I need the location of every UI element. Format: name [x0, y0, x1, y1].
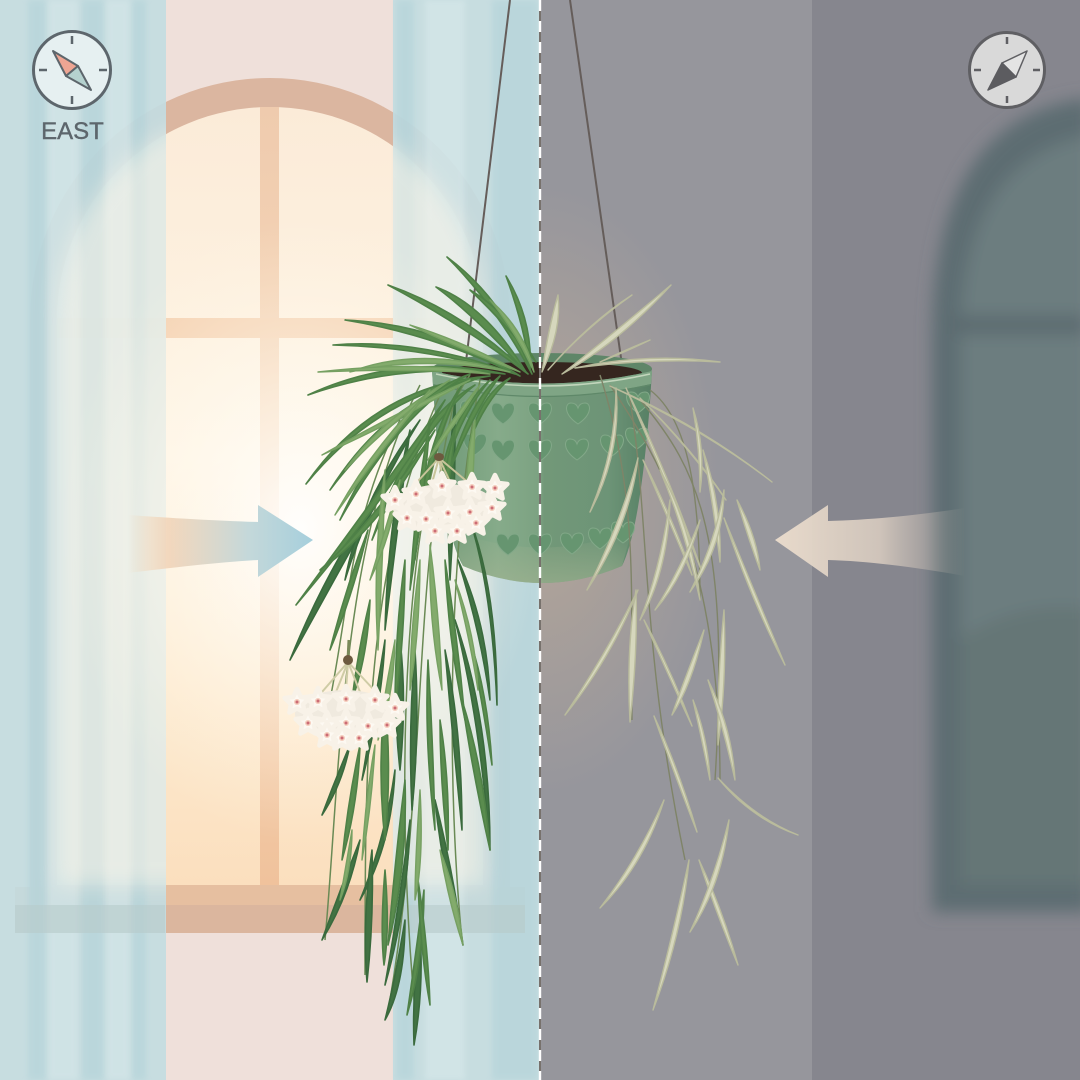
blurred distant window — [932, 98, 1080, 912]
right curtain — [393, 0, 540, 1080]
flower cluster: upper hoya umbel — [383, 453, 507, 542]
dark leaves — [290, 400, 497, 1045]
plant pot with heart pattern — [432, 353, 652, 583]
left curtain — [0, 0, 166, 1080]
thin pale stems — [600, 375, 720, 860]
icon: east compass — [34, 32, 110, 108]
arrow: weak light from far window — [775, 505, 965, 577]
light green leaves — [318, 300, 534, 945]
arrow: light entering from window — [128, 505, 313, 577]
healthy green trailing foliage — [290, 257, 536, 1045]
window light glow through curtains — [0, 0, 540, 1080]
pale leaves — [542, 285, 798, 1010]
heart reliefs — [461, 392, 649, 555]
thin stems — [325, 375, 480, 1010]
flower cluster: lower hoya umbel — [285, 640, 407, 748]
hanging wires — [464, 0, 622, 378]
panel: dim shaded side — [540, 0, 1080, 1080]
compass label: EAST: EAST — [41, 118, 104, 145]
icon: muted compass — [970, 32, 1044, 108]
panel: bright east window side — [0, 0, 540, 1080]
mid green leaves — [296, 257, 536, 1015]
pale etiolated trailing foliage — [542, 285, 798, 1010]
window with arched frame — [15, 78, 525, 933]
dashed dividing line — [539, 0, 541, 1080]
